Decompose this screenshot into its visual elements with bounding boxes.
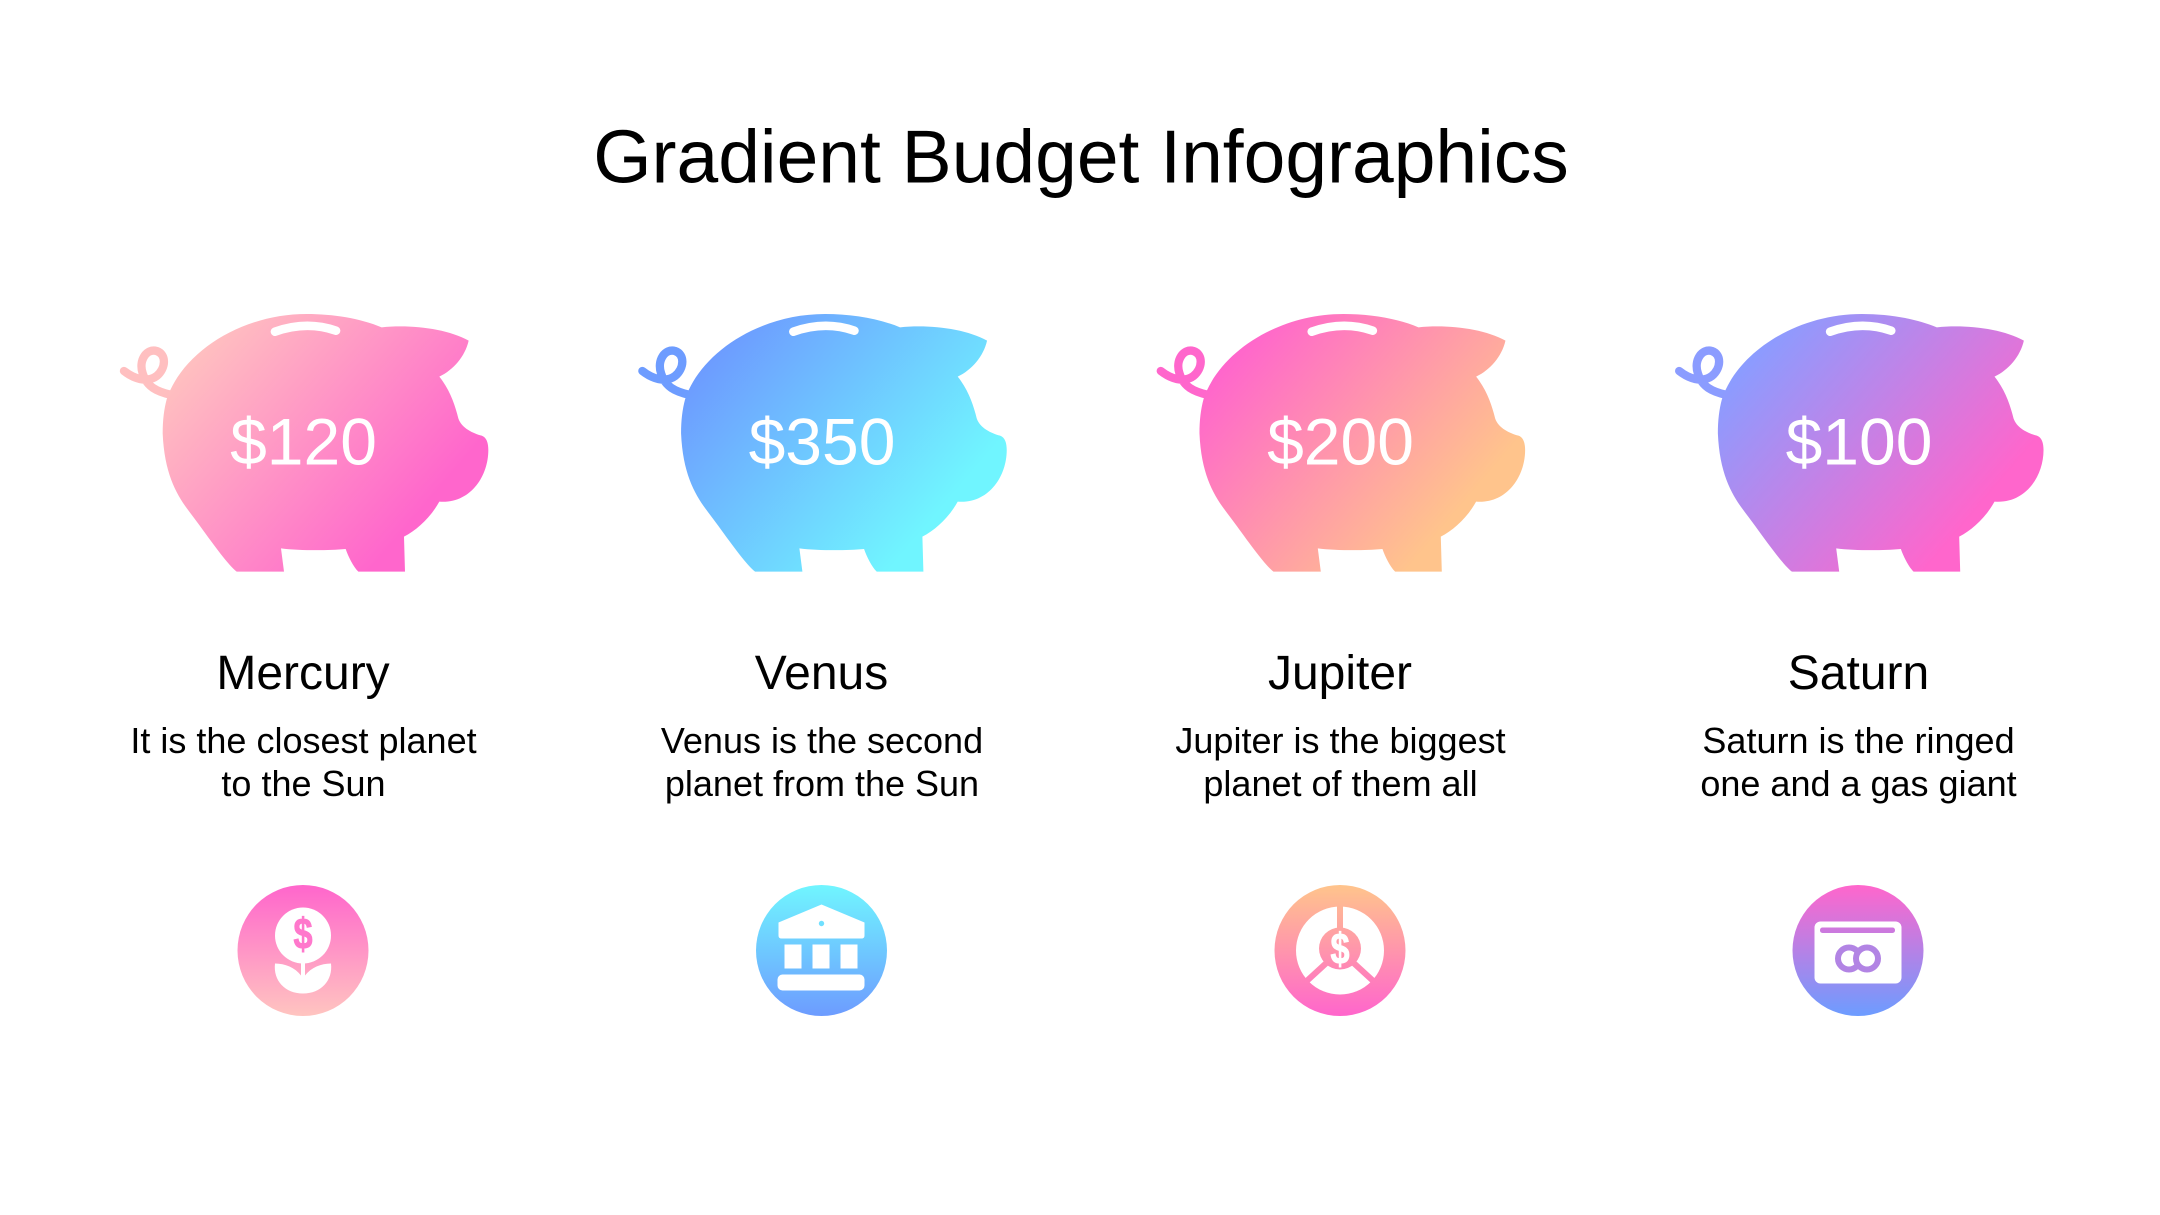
amount: $100: $100 [1786, 405, 1932, 479]
panel: Saturn [1679, 314, 2044, 1016]
title: Gradient Budget Infographics [593, 114, 1569, 198]
icon: money plant [238, 885, 368, 1016]
piggy bank: Mercury [124, 314, 488, 572]
description: Mercury: It is the closest planet [130, 720, 477, 761]
panel: Venus [642, 314, 1007, 1016]
piggy bank: Venus [642, 314, 1007, 572]
description: Saturn: one and a gas giant [1700, 763, 2017, 804]
amount: $120: $120 [230, 405, 377, 479]
panel: Mercury [124, 314, 488, 1016]
piggy bank: Jupiter [1161, 314, 1525, 572]
icon: credit card [1792, 885, 1924, 1016]
amount: $200: $200 [1267, 405, 1414, 479]
icon: budget pie: $ [1330, 925, 1350, 974]
description: Venus: planet from the Sun [665, 763, 979, 804]
icon: bank [756, 885, 887, 1016]
amount: $350: $350 [749, 405, 895, 479]
piggy bank: Saturn [1679, 314, 2044, 572]
description: Saturn: Saturn is the ringed [1702, 720, 2015, 761]
name: Venus: Venus [755, 647, 888, 700]
panel: Jupiter [1161, 314, 1525, 1016]
name: Mercury: Mercury [216, 647, 390, 700]
icon: budget pie [1274, 885, 1406, 1016]
description: Mercury: to the Sun [221, 763, 386, 804]
name: Jupiter: Jupiter [1268, 647, 1412, 700]
name: Saturn: Saturn [1788, 647, 1929, 700]
description: Venus: Venus is the second [661, 720, 983, 761]
icon: money plant: $ [293, 910, 313, 959]
description: Jupiter: planet of them all [1203, 763, 1478, 804]
description: Jupiter: Jupiter is the biggest [1175, 720, 1506, 761]
